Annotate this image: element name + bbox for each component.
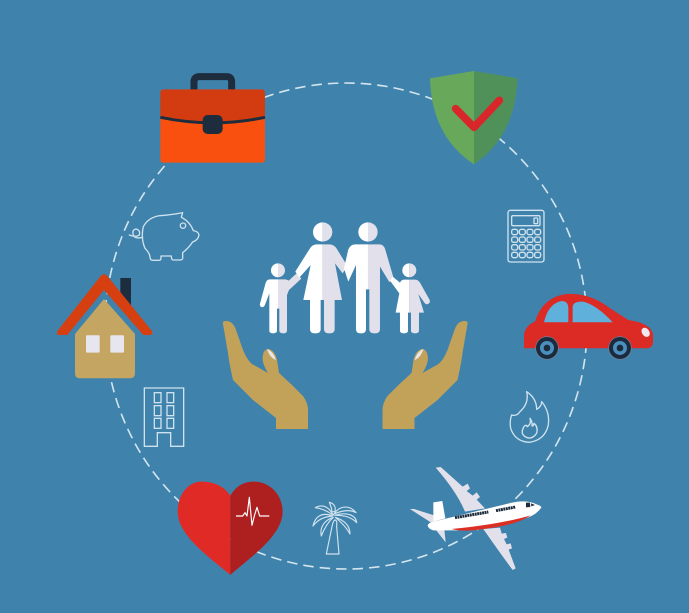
- figure: mother: [295, 222, 347, 333]
- family group: [260, 222, 430, 333]
- figure: girl: [390, 263, 430, 333]
- icon: car: [524, 294, 653, 360]
- right hand: [382, 321, 468, 429]
- icon: office building: [144, 388, 184, 446]
- left hand: [223, 321, 308, 429]
- pulse line: [236, 497, 269, 525]
- icon: shield with check: [430, 71, 518, 164]
- dashed circle: [105, 83, 587, 569]
- icon: house: [57, 274, 152, 378]
- icon: palm tree: [313, 502, 357, 554]
- icon: briefcase: [160, 77, 265, 163]
- figure: father: [344, 222, 394, 333]
- icon: airplane: [410, 467, 541, 570]
- thumbnail: [414, 349, 424, 360]
- icon: heart with pulse: [178, 482, 283, 575]
- icon: piggy bank: [129, 213, 199, 260]
- icon: calculator: [508, 210, 544, 262]
- icon: flame: [510, 392, 549, 442]
- figure: boy: [260, 263, 301, 333]
- thumbnail: [267, 349, 276, 360]
